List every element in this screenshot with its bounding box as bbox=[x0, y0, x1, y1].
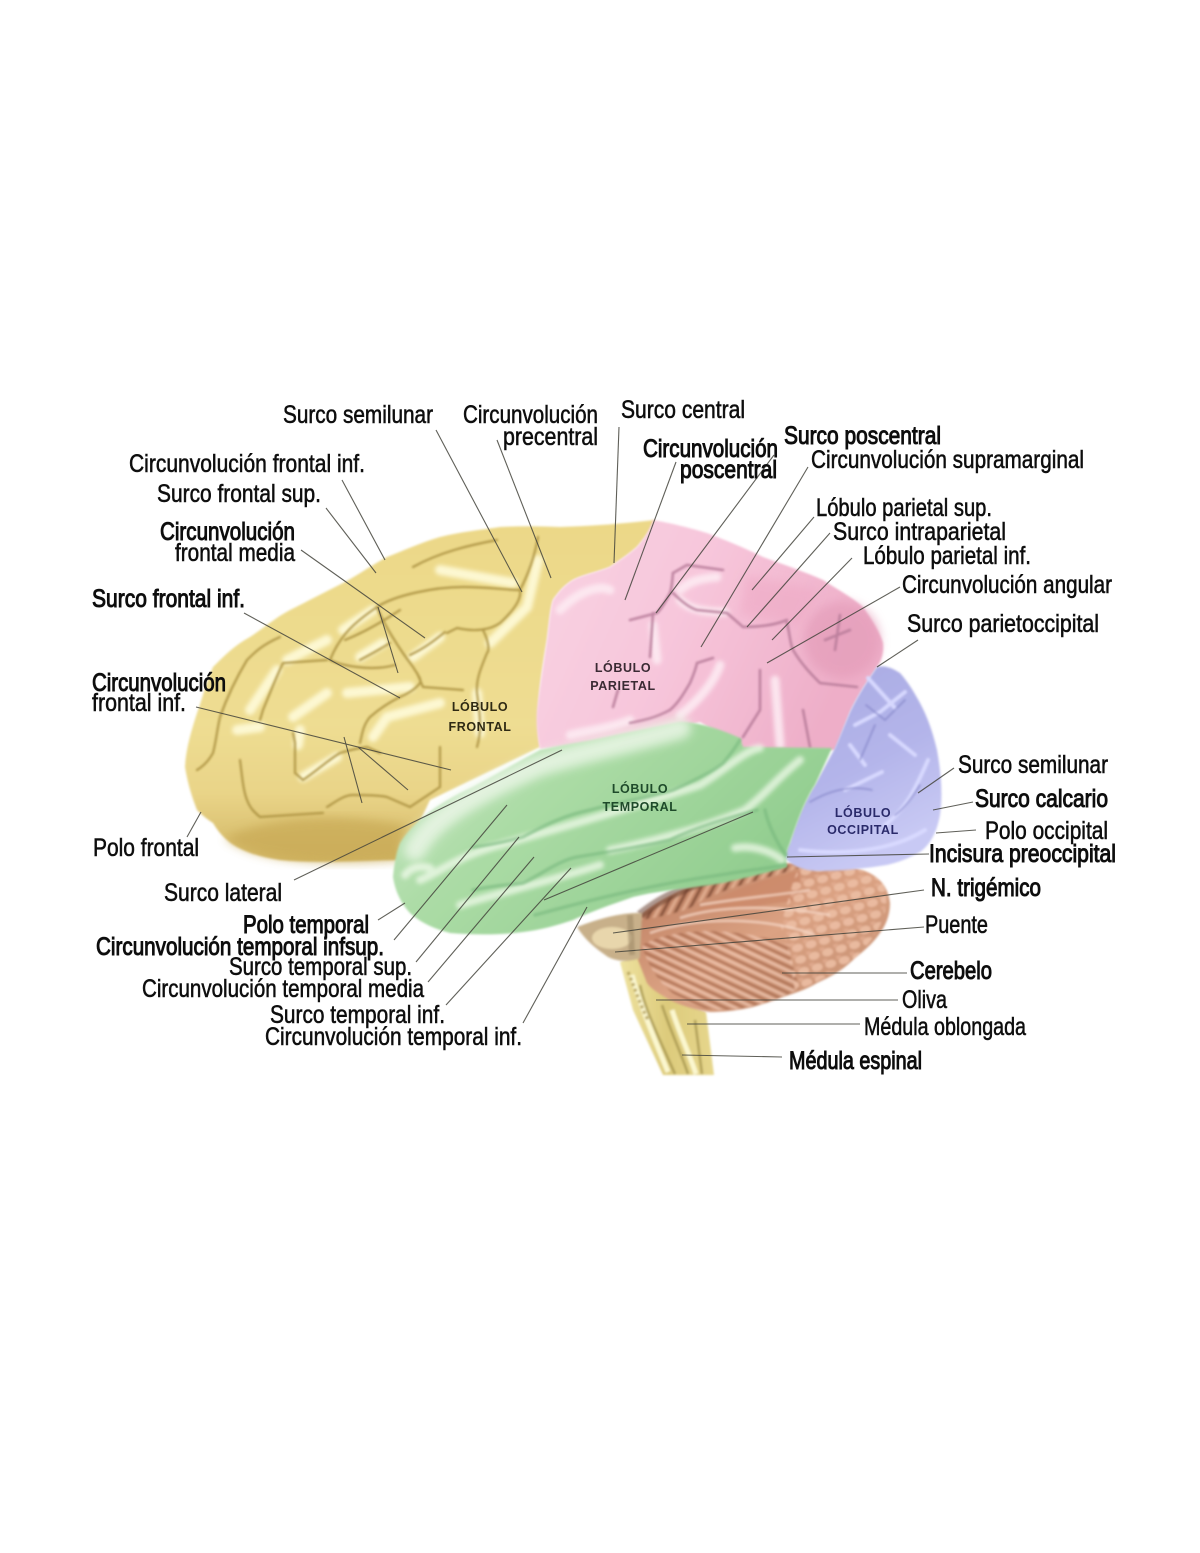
labels: top right: Lóbulo parietal inf. bbox=[863, 542, 1031, 570]
labels: bottom left: Surco temporal inf. bbox=[270, 1001, 445, 1029]
labels: top right: Surco central bbox=[621, 396, 745, 424]
labels: bottom left: Surco temporal sup. bbox=[229, 953, 412, 981]
labels: top right: Surco poscentral bbox=[784, 422, 941, 450]
labels: top right: poscentral bbox=[680, 456, 777, 484]
labels: top left: frontal media bbox=[175, 539, 295, 567]
occipital lobe bbox=[783, 666, 941, 871]
labels: top left: Surco frontal sup. bbox=[157, 480, 321, 508]
leader lines bbox=[187, 427, 976, 1057]
lobe name: frontal: FRONTAL bbox=[449, 720, 511, 734]
labels: bottom right: N. trigémico bbox=[931, 874, 1041, 902]
labels: top right: Circunvolución supramarginal bbox=[811, 446, 1084, 474]
labels: top left: Surco frontal inf. bbox=[92, 585, 245, 613]
labels: bottom left: Circunvolución temporal inf. bbox=[265, 1023, 522, 1051]
labels: top right: Lóbulo parietal sup. bbox=[816, 494, 992, 522]
labels: top left bbox=[92, 401, 598, 717]
labels: top left: frontal inf. bbox=[92, 689, 186, 717]
labels: top right: Circunvolución bbox=[643, 435, 778, 463]
labels: bottom right: Polo occipital bbox=[985, 817, 1108, 845]
lobe name: frontal: LÓBULO bbox=[452, 699, 508, 714]
pons bbox=[577, 913, 642, 961]
labels: top right bbox=[621, 396, 1112, 638]
frontal lobe bbox=[185, 520, 655, 863]
labels: bottom right: Surco semilunar bbox=[958, 751, 1108, 779]
lobe name: frontal bbox=[449, 699, 511, 734]
labels: bottom right: Incisura preoccipital bbox=[929, 840, 1116, 868]
labels: bottom right: Médula espinal bbox=[789, 1047, 922, 1075]
cerebellum bbox=[637, 862, 890, 1012]
lobe name: temporal bbox=[603, 781, 677, 814]
frontal lobe sulci bbox=[197, 537, 538, 817]
labels: bottom right: Oliva bbox=[902, 986, 947, 1014]
labels: bottom left bbox=[93, 834, 522, 1051]
labels: bottom right: Puente bbox=[925, 911, 988, 939]
labels: top right: Circunvolución angular bbox=[902, 571, 1112, 599]
labels: top left: Circunvolución bbox=[160, 518, 295, 546]
labels: bottom left: Polo temporal bbox=[243, 911, 369, 939]
labels: bottom left: Surco lateral bbox=[164, 879, 282, 907]
parietal lobe bbox=[537, 520, 883, 750]
labels: top left: Circunvolución bbox=[92, 669, 226, 697]
occipital lobe sulci bbox=[800, 678, 928, 852]
labels: bottom right: Surco calcario bbox=[975, 785, 1108, 813]
labels: bottom right: Médula oblongada bbox=[864, 1013, 1026, 1041]
labels: top left: Circunvolución frontal inf. bbox=[129, 450, 365, 478]
lobe name: occipital: OCCIPITAL bbox=[827, 823, 899, 837]
spinal cord and brainstem bbox=[620, 950, 714, 1075]
labels: top left: Surco semilunar bbox=[283, 401, 433, 429]
labels: top right: Surco intraparietal bbox=[833, 518, 1006, 546]
lobe name: parietal bbox=[590, 660, 656, 693]
labels: top right: Surco parietoccipital bbox=[907, 610, 1099, 638]
labels: top left: Circunvolución bbox=[463, 401, 598, 429]
lobe name: parietal: PARIETAL bbox=[590, 679, 656, 693]
labels: bottom left: Circunvolución temporal media bbox=[142, 975, 424, 1003]
labels: bottom left: Polo frontal bbox=[93, 834, 199, 862]
temporal lobe shading bbox=[405, 728, 800, 915]
parietal lobe sulci bbox=[560, 565, 880, 747]
lobe name: occipital bbox=[827, 805, 899, 837]
labels: bottom left: Circunvolución temporal infsup. bbox=[96, 933, 384, 961]
lobe name: temporal: LÓBULO bbox=[612, 781, 668, 796]
lobe name: temporal: TEMPORAL bbox=[603, 800, 677, 814]
labels: bottom right bbox=[789, 751, 1116, 1075]
labels: bottom right: Cerebelo bbox=[910, 957, 992, 985]
labels: top left: precentral bbox=[503, 423, 598, 451]
lobe name: parietal: LÓBULO bbox=[595, 660, 651, 675]
brain illustration bbox=[185, 520, 941, 1075]
temporal lobe bbox=[393, 722, 832, 934]
lobe name: occipital: LÓBULO bbox=[835, 805, 891, 820]
